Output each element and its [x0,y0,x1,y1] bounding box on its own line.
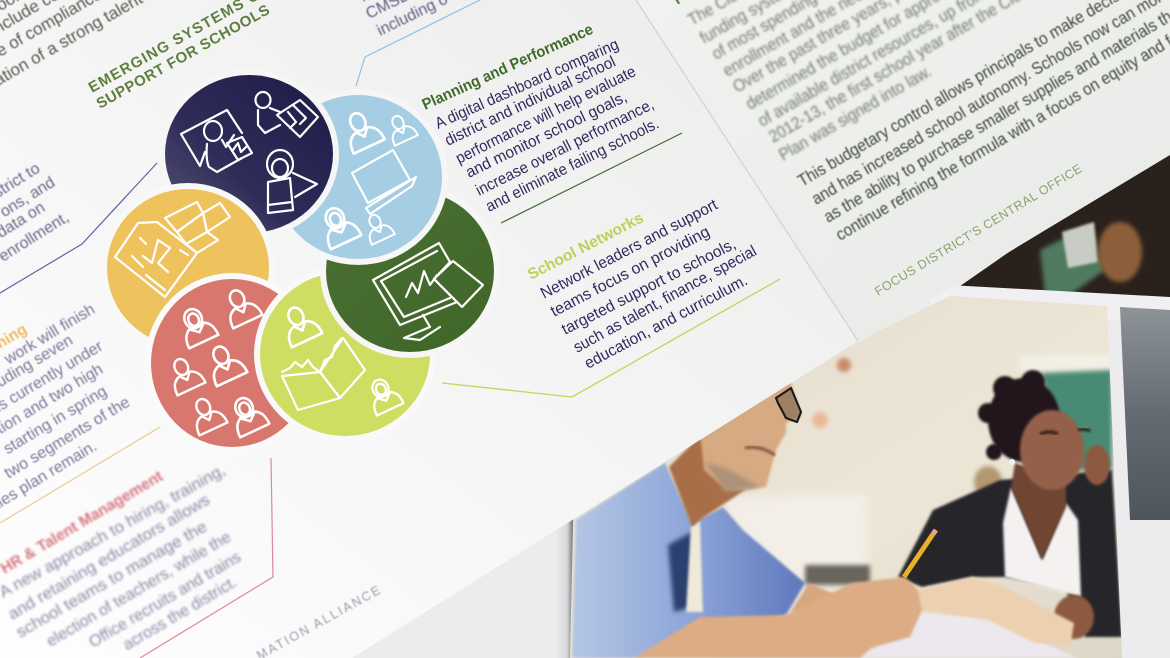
body: facilities: two segments of the [2,394,133,482]
circle: navy [159,69,339,239]
icon: green monitor and tablet [373,243,483,340]
left margin shadow [555,500,575,658]
body: HR and talent management: school teams to manage the [14,519,210,641]
heading: planning and performance: Planning and Performance [420,21,596,114]
photo: students in classroom [560,290,1130,658]
text block: school networks [525,196,760,373]
heading: school networks: School Networks [525,210,646,284]
text: left data paragraph [0,160,72,265]
text block: right page [670,0,1170,245]
body: HR and talent management [0,462,244,654]
body: planning and performance: and eliminate failing schools. [483,115,662,216]
crease [636,0,858,341]
heading: emerging systems of support for schools: SUPPORT FOR SCHOOLS [94,1,274,112]
connector: pink [140,458,273,658]
icon: yellow map and bricks [115,202,230,297]
body: planning and performance [433,36,662,216]
body: planning and performance: and monitor school goals, [463,89,630,182]
body: HR and talent management: A new approach to hiring, training, [0,462,228,601]
text block: planning and performance [420,21,662,216]
connector: lime [442,279,780,397]
diagram: six overlapping circles with icons [101,69,500,453]
body: school networks: teams focus on providing [548,223,713,321]
icon: navy people and documents [181,92,318,213]
icon: blue people and laptop [315,107,418,249]
icon: red people [164,284,269,437]
circle: lime [254,266,436,442]
body: school networks: targeted support to schools, [559,236,739,339]
white band between photos [930,284,1170,320]
body: planning and performance: district and individual school [442,53,618,150]
connector: yellow [0,427,160,523]
circle: red [145,273,319,453]
body: facilities [0,301,133,529]
connector: purple [0,163,157,293]
text block: HR and talent management [0,462,244,654]
body: HR and talent management: election of teachers, while the [44,529,234,650]
body: planning and performance: A digital dashboard comparing [433,36,621,133]
body: school networks: Network leaders and support [538,196,721,303]
body: facilities: work will finish [1,301,98,369]
photo: dark upper right [940,140,1170,300]
icon: lime people and book [277,301,404,416]
body: school networks: such as talent, finance, special [571,243,760,357]
body: planning and performance: performance will help evaluate [453,63,639,168]
footer: right page: FOCUS DISTRICT'S CENTRAL OFFICE [872,162,1084,299]
heading: HR and talent management: HR & Talent Management [0,468,166,578]
circle: green [320,184,500,358]
text block: facilities planning [0,301,133,529]
connector: blue [356,0,480,86]
photo: gray panel at right edge [1120,307,1170,520]
paragraph: funding: Plan was signed into law. [776,62,935,165]
connector: dark green [501,133,682,223]
circle: yellow overlap on navy [107,183,269,260]
body: planning and performance: increase overall performance, [473,96,657,200]
body: HR and talent management: and retaining educators allows [5,492,213,623]
brochure: right page [630,0,1170,343]
body: HR and talent management: across the district. [120,574,240,654]
circle: yellow [101,183,275,353]
body: facilities: starting in spring [1,383,110,458]
circle: blue [268,89,448,265]
brochure: left page [0,0,858,658]
body: HR and talent management: Office recruits and trains [86,549,244,651]
body: school networks: education, and curriculum. [582,272,751,373]
body: school networks [538,196,760,373]
